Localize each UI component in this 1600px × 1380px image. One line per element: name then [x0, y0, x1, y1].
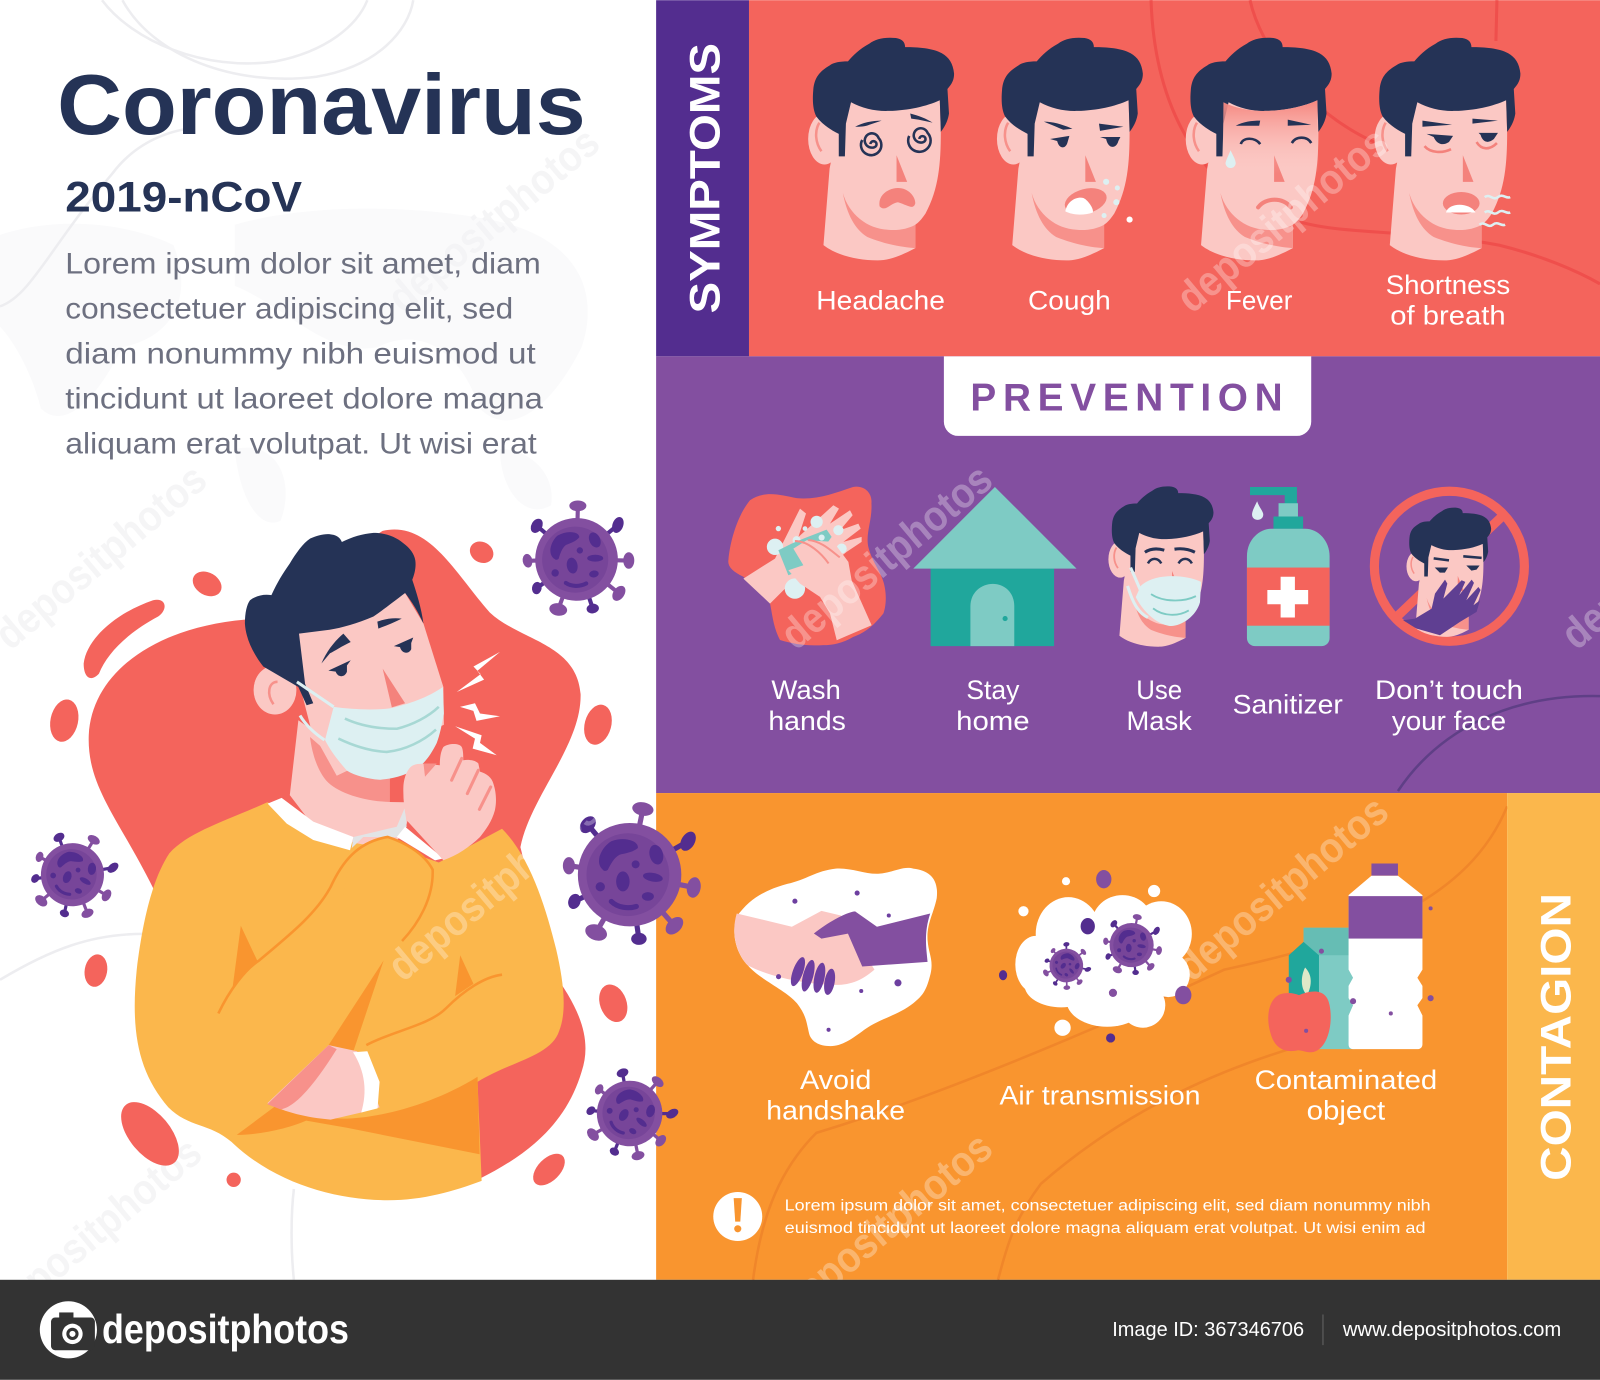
hair: [245, 533, 423, 705]
text block: intro: consectetuer adipiscing elit, sed: [65, 293, 513, 326]
watermarks: depositphotos: [1167, 786, 1398, 991]
icon: shortness of breath face: [1374, 38, 1520, 260]
icon: house: [913, 487, 1077, 646]
icon: virus top right: [514, 491, 643, 624]
label: use mask: Use: [1136, 675, 1182, 705]
icon: man wearing mask: [1108, 486, 1213, 647]
label: fever: Fever: [1226, 285, 1293, 315]
icon: sanitizer bottle: [1247, 487, 1330, 646]
watermarks: depositphotos: [1167, 118, 1398, 322]
collar: [268, 798, 353, 850]
wrist band: [397, 827, 443, 860]
icon: virus large: [563, 801, 702, 945]
panel: contagion background: [656, 793, 1507, 1280]
footer bar: [0, 1280, 1600, 1380]
label: avoid handshake: [766, 1065, 905, 1126]
label: sanitizer: Sanitizer: [1233, 689, 1343, 719]
text block: intro: aliquam erat volutpat. Ut wisi erat: [65, 427, 537, 460]
icon: air transmission cloud: [999, 870, 1192, 1043]
label: stay home: Stay: [966, 675, 1020, 705]
text block: intro: diam nonummy nibh euismod ut: [65, 337, 536, 370]
label: avoid handshake: Avoid: [800, 1065, 871, 1095]
text block: intro: [65, 248, 543, 460]
cough lightning marks: [455, 652, 500, 755]
watermarks on white: depositphotos: [379, 118, 609, 322]
watermarks on white: [0, 118, 609, 1332]
icon: footer logo: [40, 1301, 97, 1358]
panel: symptoms sidebar: [656, 0, 749, 356]
label: stay home: [956, 675, 1030, 736]
heading: contagion: CONTAGION: [1532, 893, 1580, 1181]
label: headache: Headache: [816, 285, 945, 315]
label: use mask: Mask: [1127, 706, 1193, 736]
label: wash hands: [768, 675, 846, 736]
panel: symptoms background: [749, 0, 1600, 356]
label: stay home: home: [956, 706, 1030, 736]
upper sleeve: [342, 837, 433, 903]
lower hand and cuff: [267, 1045, 380, 1120]
eyes and brows: [321, 618, 413, 676]
watermarks: depositphotos: [771, 1123, 1002, 1327]
background blob: [89, 529, 585, 1179]
icon: fever face: [1186, 38, 1332, 260]
small red blobs: [46, 537, 632, 1191]
label: use mask: [1127, 675, 1193, 736]
icon: cough face: [997, 38, 1143, 260]
panel: contagion sidebar: [1507, 793, 1600, 1280]
title: Coronavirus: [57, 57, 586, 153]
label: do not touch your face: Don’t touch: [1375, 675, 1523, 705]
sweater shadows: [233, 926, 480, 1154]
footer url: www.depositphotos.com: [1342, 1319, 1561, 1341]
head: [254, 666, 296, 714]
label: shortness of breath: [1386, 270, 1510, 331]
text block: intro: tincidunt ut laoreet dolore magna: [65, 382, 543, 415]
heading: prevention: [944, 356, 1311, 436]
arm lines: [218, 837, 502, 1045]
label: contaminated object: object: [1307, 1096, 1386, 1126]
label: do not touch your face: your face: [1392, 706, 1506, 736]
icon: virus left: [20, 818, 130, 930]
icon: headache face: [808, 38, 954, 260]
illustration: coughing man with mask: [46, 529, 632, 1200]
label: avoid handshake: handshake: [766, 1096, 905, 1126]
heading: prevention: PREVENTION: [970, 376, 1283, 419]
heading: symptoms: SYMPTOMS: [681, 43, 729, 313]
watermarks: depositphotos: [379, 786, 609, 991]
label: contaminated object: Contaminated: [1255, 1065, 1437, 1095]
label: contaminated object: [1255, 1065, 1437, 1126]
mask: [325, 687, 444, 780]
panel: prevention background: [656, 356, 1600, 793]
text block: note: Lorem ipsum dolor sit amet, consectetuer adipiscing elit, sed diam nonummy nibh: [785, 1197, 1431, 1214]
label: shortness of breath: Shortness: [1386, 270, 1510, 300]
icon: virus lower right: [571, 1052, 693, 1175]
label: wash hands: Wash: [771, 675, 841, 705]
icon: do not touch face: [1374, 491, 1524, 641]
label: do not touch your face: [1375, 675, 1523, 736]
label: cough: Cough: [1028, 285, 1111, 315]
icon: warning: [713, 1192, 762, 1241]
panel: intro background: [0, 0, 656, 1280]
fist: [403, 744, 496, 860]
subtitle: 2019-nCoV: [65, 173, 302, 221]
label: wash hands: hands: [768, 706, 846, 736]
watermarks: depositphotos: [771, 455, 1002, 659]
footer brand: depositphotos: [102, 1306, 349, 1352]
sweater: [135, 802, 564, 1200]
watermarks: [379, 118, 1600, 1327]
neck: [290, 720, 408, 845]
footer image id: Image ID: 367346706: [1112, 1319, 1304, 1341]
text block: note: [785, 1197, 1431, 1237]
text block: note: euismod tincidunt ut laoreet dolore magna aliquam erat volutpat. Ut wisi enim ad: [785, 1220, 1426, 1237]
icon: contaminated objects: [1268, 863, 1434, 1052]
label: air transmission: Air transmission: [999, 1080, 1201, 1110]
text block: intro: Lorem ipsum dolor sit amet, diam: [65, 248, 541, 281]
icon: washing hands: [728, 487, 886, 645]
label: shortness of breath: of breath: [1390, 301, 1506, 331]
icon: avoid handshake: [734, 868, 937, 1046]
